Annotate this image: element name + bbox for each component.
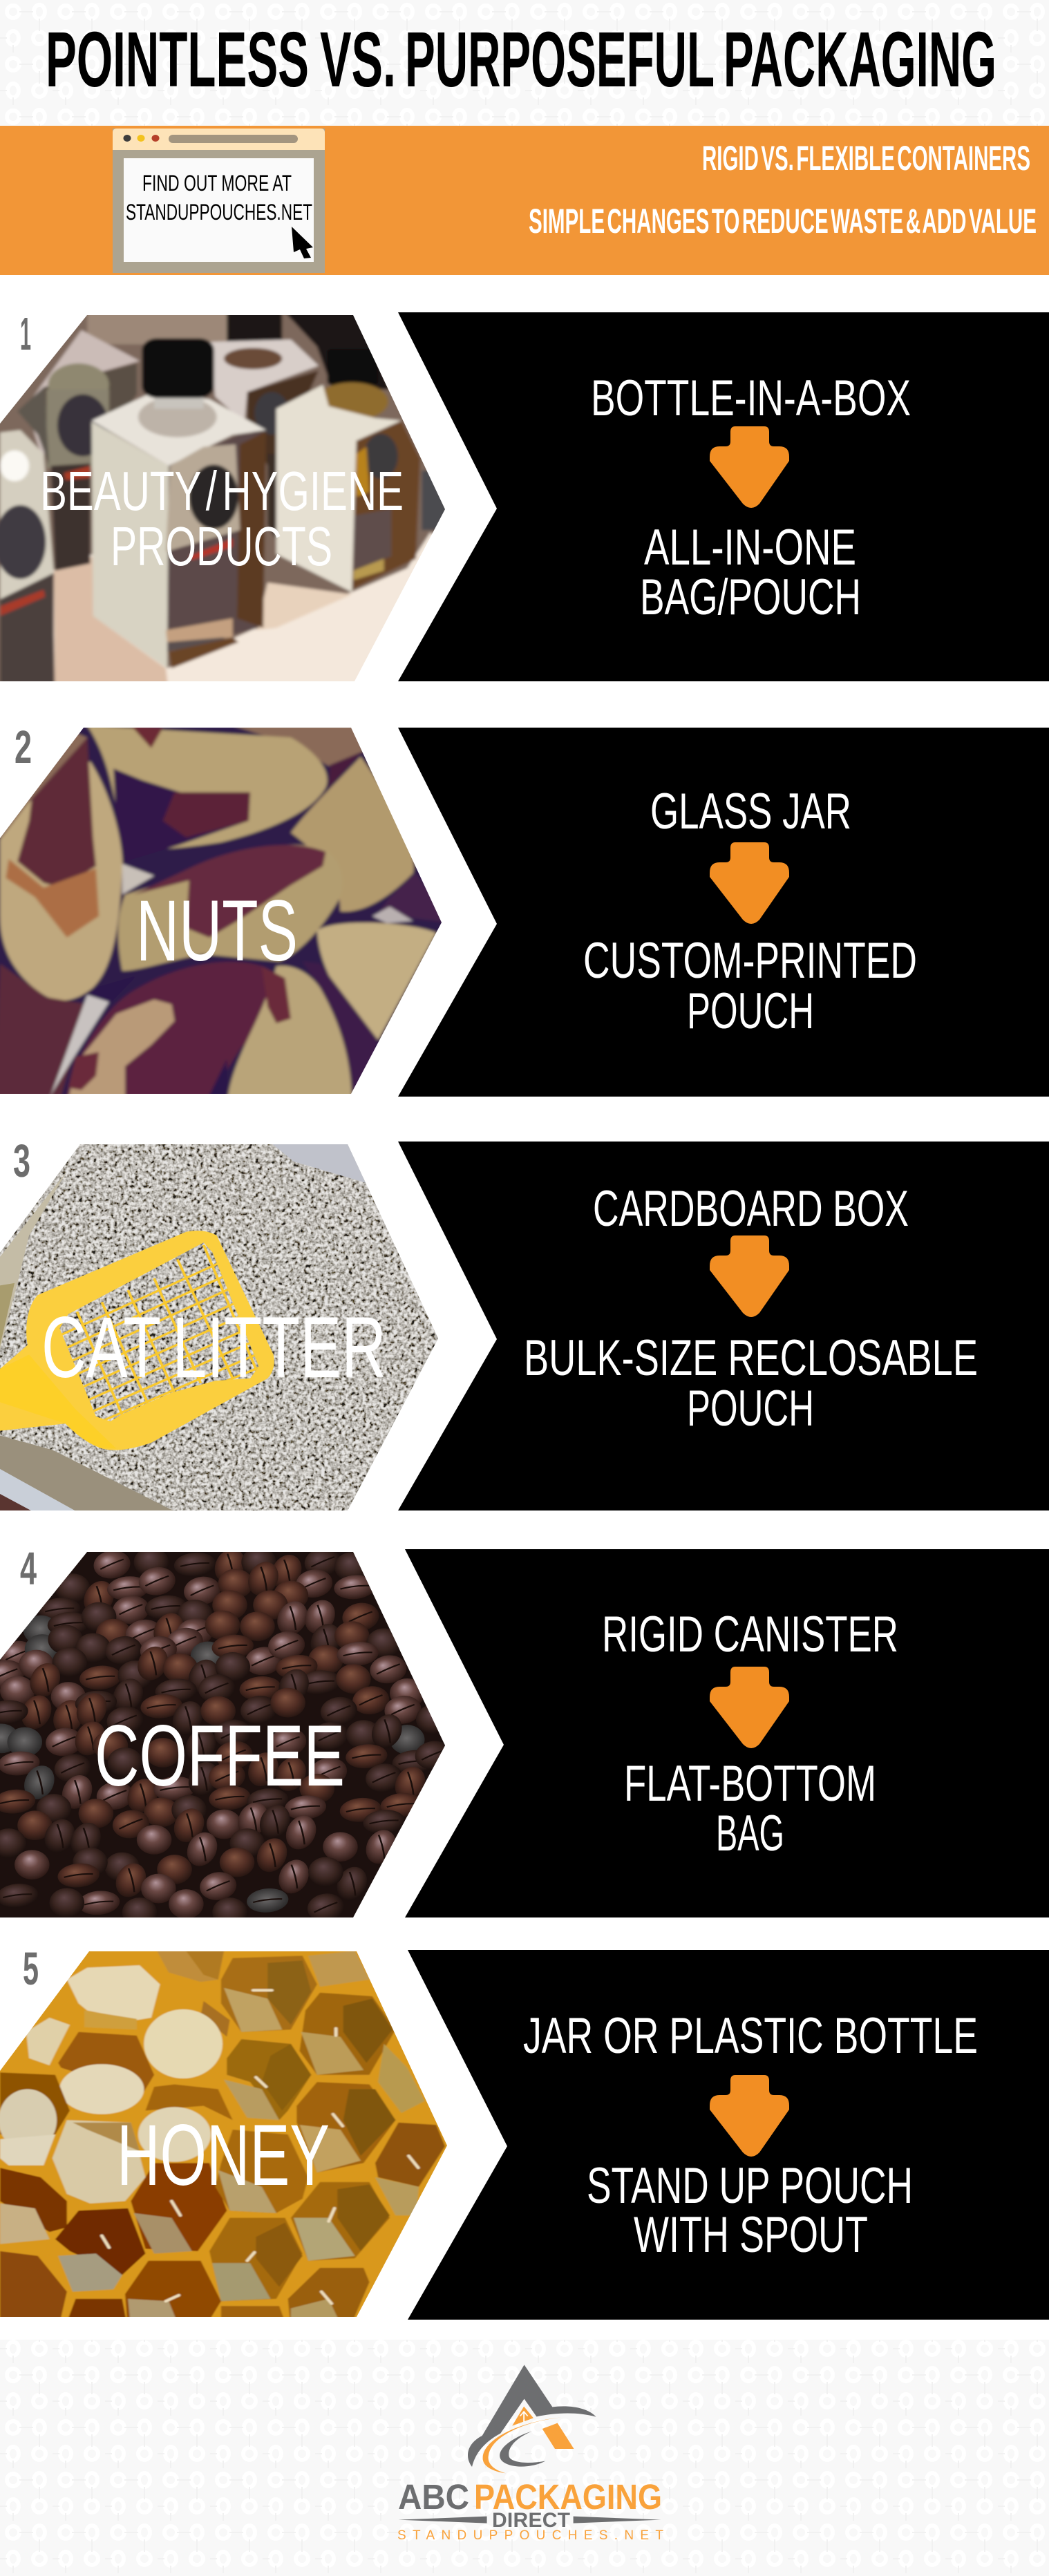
arrow 4 [710, 1667, 789, 1748]
heading: nuts: NUTS [136, 883, 298, 979]
logo mark [398, 2365, 661, 2523]
browser window illustration [113, 129, 325, 273]
browser window illustration: FIND OUT MORE AT [142, 171, 292, 196]
logo text: ABC: ABC [398, 2477, 469, 2517]
logo text: direct: DIRECT [492, 2509, 570, 2532]
black panel 5 [408, 1950, 1049, 2320]
title [46, 16, 996, 103]
main box [92, 422, 169, 668]
title: PURPOSEFUL [405, 16, 715, 103]
number 2: 2 [15, 721, 32, 773]
logo text: packaging: PACKAGING [474, 2477, 662, 2517]
number 5: 5 [23, 1943, 39, 1995]
number 4: 4 [20, 1543, 37, 1595]
row 2: nuts [0, 721, 1049, 1107]
label: glass jar: GLASS JAR [650, 784, 851, 840]
heading: honey: HONEY [117, 2108, 330, 2204]
heading: beauty / hygiene: BEAUTY / HYGIENE [40, 460, 404, 522]
label: all-in-one: ALL-IN-ONE [644, 520, 856, 576]
label: cardboard box: CARDBOARD BOX [593, 1181, 909, 1237]
row 3: cat litter [0, 1135, 1049, 1514]
arrow 5 [710, 2075, 789, 2157]
heading: products: PRODUCTS [111, 515, 332, 577]
shelf [51, 531, 433, 681]
browser window illustration: STANDUPPOUCHES.NET [126, 200, 312, 225]
photo: honeycomb [0, 1949, 460, 2330]
label: pouch: POUCH [687, 983, 814, 1039]
number 3: 3 [13, 1135, 30, 1187]
label: custom-printed: CUSTOM-PRINTED [583, 933, 917, 989]
footer pattern panel [0, 2340, 1049, 2576]
left bottle [0, 430, 54, 599]
logo text: url: STANDUPPOUCHES.NET [397, 2528, 663, 2543]
row 1: beauty / hygiene products: 1 [20, 308, 31, 360]
heading: coffee: COFFEE [95, 1708, 345, 1804]
photo: coffee beans [0, 1543, 460, 1929]
row 5: honey [0, 1943, 1049, 2330]
black panel 2 [398, 728, 1049, 1097]
black panel 1 [398, 312, 1049, 681]
back middle box [225, 315, 284, 343]
photo: litter and scoop [0, 1140, 442, 1514]
label: bag: BAG [716, 1806, 784, 1862]
label: with spout: WITH SPOUT [634, 2207, 868, 2263]
arrow 1 [710, 426, 789, 508]
label: rigid canister: RIGID CANISTER [602, 1607, 898, 1663]
logo: ABC Packaging Direct [397, 2365, 663, 2543]
title: VS. [320, 16, 396, 103]
label: pouch: POUCH [687, 1381, 814, 1437]
right box [325, 379, 390, 417]
label: stand up pouch: STAND UP POUCH [587, 2158, 913, 2214]
title: POINTLESS [46, 16, 309, 103]
photo: brazil nuts [0, 726, 460, 1107]
heading: cat litter: CAT LITTER [41, 1300, 386, 1396]
row 4: coffee [0, 1543, 1049, 1929]
black panel 4 [405, 1549, 1049, 1917]
label: bottle-in-a-box: BOTTLE-IN-A-BOX [591, 370, 911, 426]
orange banner [0, 126, 1049, 275]
black panel 3 [398, 1142, 1049, 1510]
label: bag/pouch: BAG/POUCH [640, 569, 861, 625]
arrow 2 [710, 842, 789, 924]
photo: beauty bottles [0, 311, 460, 692]
back left box [26, 330, 140, 464]
label: flat-bottom: FLAT-BOTTOM [624, 1756, 876, 1812]
arrow 3 [710, 1235, 789, 1317]
row 1: beauty / hygiene products [0, 308, 1049, 692]
header pattern panel [0, 0, 1049, 126]
